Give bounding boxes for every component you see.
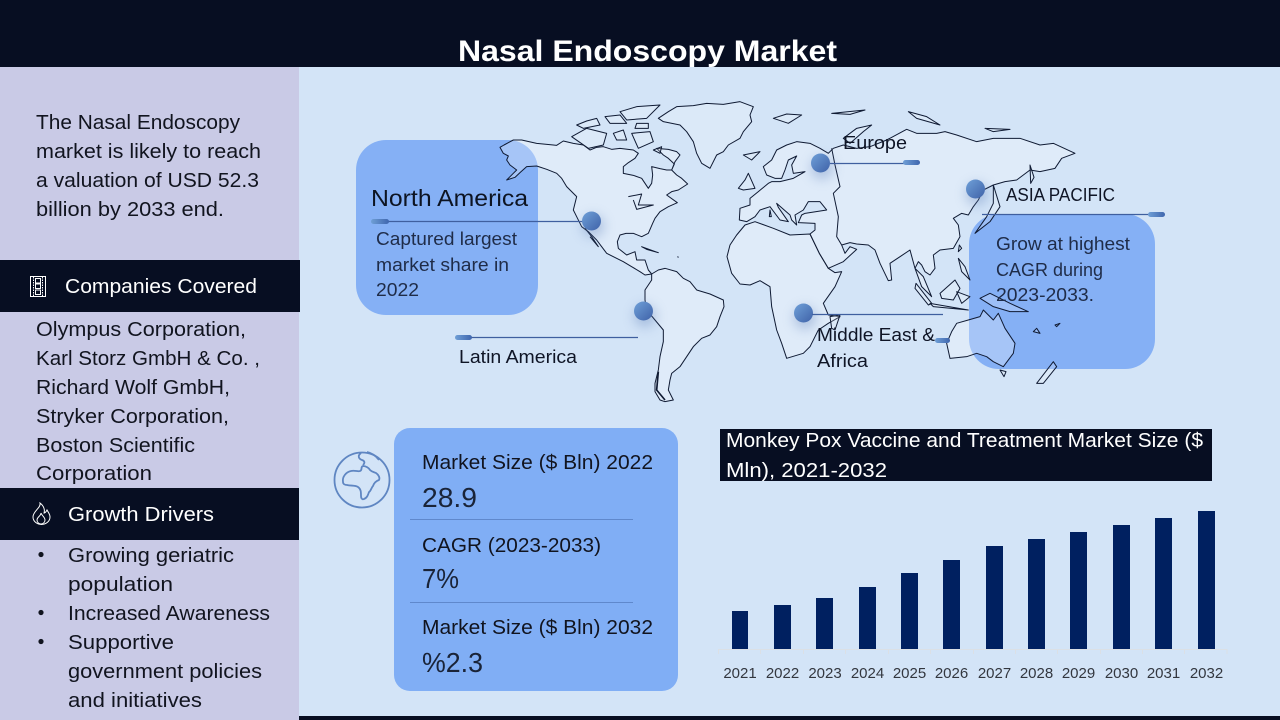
bar chart: 2032 xyxy=(1190,665,1223,682)
stat: market size 2032 xyxy=(422,617,653,678)
text block: company list: Karl Storz GmbH & Co. , xyxy=(36,348,260,370)
bar chart: 2030 xyxy=(1105,665,1138,682)
title: Nasal Endoscopy Market xyxy=(458,35,837,68)
bar chart: 2024 xyxy=(851,665,884,682)
panel: Asia Pacific callout box xyxy=(969,214,1155,369)
icon: flame xyxy=(33,503,50,524)
header bar xyxy=(0,0,1280,67)
text block: growth driver bullets: population xyxy=(68,574,173,596)
map marker: Latin America: Latin America xyxy=(459,347,578,367)
map marker: Asia Pacific: ASIA PACIFIC xyxy=(1006,185,1115,205)
text block: company list xyxy=(36,319,260,485)
heading: chart title xyxy=(720,429,1212,482)
heading: Companies Covered: Companies Covered xyxy=(65,276,257,298)
panel: left sidebar xyxy=(0,67,300,720)
bar chart: 2026 xyxy=(935,665,968,682)
heading: chart title: Mln), 2021-2032 xyxy=(726,460,887,482)
text block: market summary xyxy=(36,112,261,221)
map marker: North America: North America xyxy=(371,185,528,211)
panel: key market statistics xyxy=(394,428,678,691)
icon: film strip building xyxy=(30,276,46,296)
text block: company list: Richard Wolf GmbH, xyxy=(36,377,230,399)
text block: market summary: a valuation of USD 52.3 xyxy=(36,170,259,192)
stat: CAGR xyxy=(422,535,601,594)
text block: growth driver bullets xyxy=(38,545,270,712)
heading: Growth Drivers xyxy=(0,488,299,540)
stat: market size 2022: 28.9 xyxy=(422,482,477,513)
icon: globe xyxy=(334,452,390,508)
text block: growth driver bullets: Increased Awareness xyxy=(68,603,270,625)
text block: company list: Stryker Corporation, xyxy=(36,406,229,428)
heading: Companies Covered xyxy=(0,260,300,312)
map marker: Asia Pacific: 2023-2033. xyxy=(996,285,1094,305)
bar chart: 2022 xyxy=(766,665,799,682)
text block: company list: Corporation xyxy=(36,463,152,485)
map marker: Latin America xyxy=(455,302,656,367)
map marker: Asia Pacific xyxy=(966,180,1165,305)
stat: market size 2032: %2.3 xyxy=(422,647,483,678)
stat: market size 2022: Market Size ($ Bln) 2022 xyxy=(422,452,653,474)
bar chart: 2021 xyxy=(723,665,757,682)
bar chart: 2023 xyxy=(808,665,842,682)
bar chart: 2028 xyxy=(1020,665,1053,682)
text block: market summary: market is likely to reach xyxy=(36,141,261,163)
map marker: Middle East and Africa: Africa xyxy=(817,351,869,371)
map marker: Asia Pacific: CAGR during xyxy=(996,260,1103,280)
stat: CAGR: 7% xyxy=(422,563,459,594)
map marker: Asia Pacific: Grow at highest xyxy=(996,234,1130,254)
map marker: North America xyxy=(371,185,604,300)
stat: market size 2022 xyxy=(422,452,653,513)
text block: market summary: The Nasal Endoscopy xyxy=(36,112,240,134)
panel: North America callout box xyxy=(356,140,538,315)
bar chart: 2025 xyxy=(893,665,926,682)
text block: company list: Olympus Corporation, xyxy=(36,319,246,341)
bar chart: 2027 xyxy=(978,665,1011,682)
map marker: Middle East and Africa: Middle East & xyxy=(817,325,935,345)
stat: CAGR: CAGR (2023-2033) xyxy=(422,535,601,557)
footer bar xyxy=(299,716,1280,720)
stat: market size 2032: Market Size ($ Bln) 2032 xyxy=(422,617,653,639)
bar chart: 2031 xyxy=(1147,665,1180,682)
text block: growth driver bullets: Supportive xyxy=(68,632,174,654)
text block: growth driver bullets: government policies xyxy=(68,661,262,683)
text block: market summary: billion by 2033 end. xyxy=(36,199,224,221)
map marker: North America: market share in xyxy=(376,255,509,275)
bar chart: 2029 xyxy=(1062,665,1095,682)
world map xyxy=(500,102,1075,402)
heading: chart title: Monkey Pox Vaccine and Treatment Market Size ($ xyxy=(726,430,1203,452)
map marker: North America: Captured largest xyxy=(376,229,517,249)
bar chart xyxy=(718,511,1227,682)
text block: growth driver bullets: Growing geriatric xyxy=(68,545,234,567)
text block: company list: Boston Scientific xyxy=(36,435,195,457)
text block: growth driver bullets: and initiatives xyxy=(68,690,202,712)
map marker: North America: 2022 xyxy=(376,280,419,300)
map marker: Europe: Europe xyxy=(843,133,907,153)
map marker: Europe xyxy=(811,133,920,179)
map marker: Middle East and Africa xyxy=(794,304,950,371)
heading: Growth Drivers: Growth Drivers xyxy=(68,504,214,526)
